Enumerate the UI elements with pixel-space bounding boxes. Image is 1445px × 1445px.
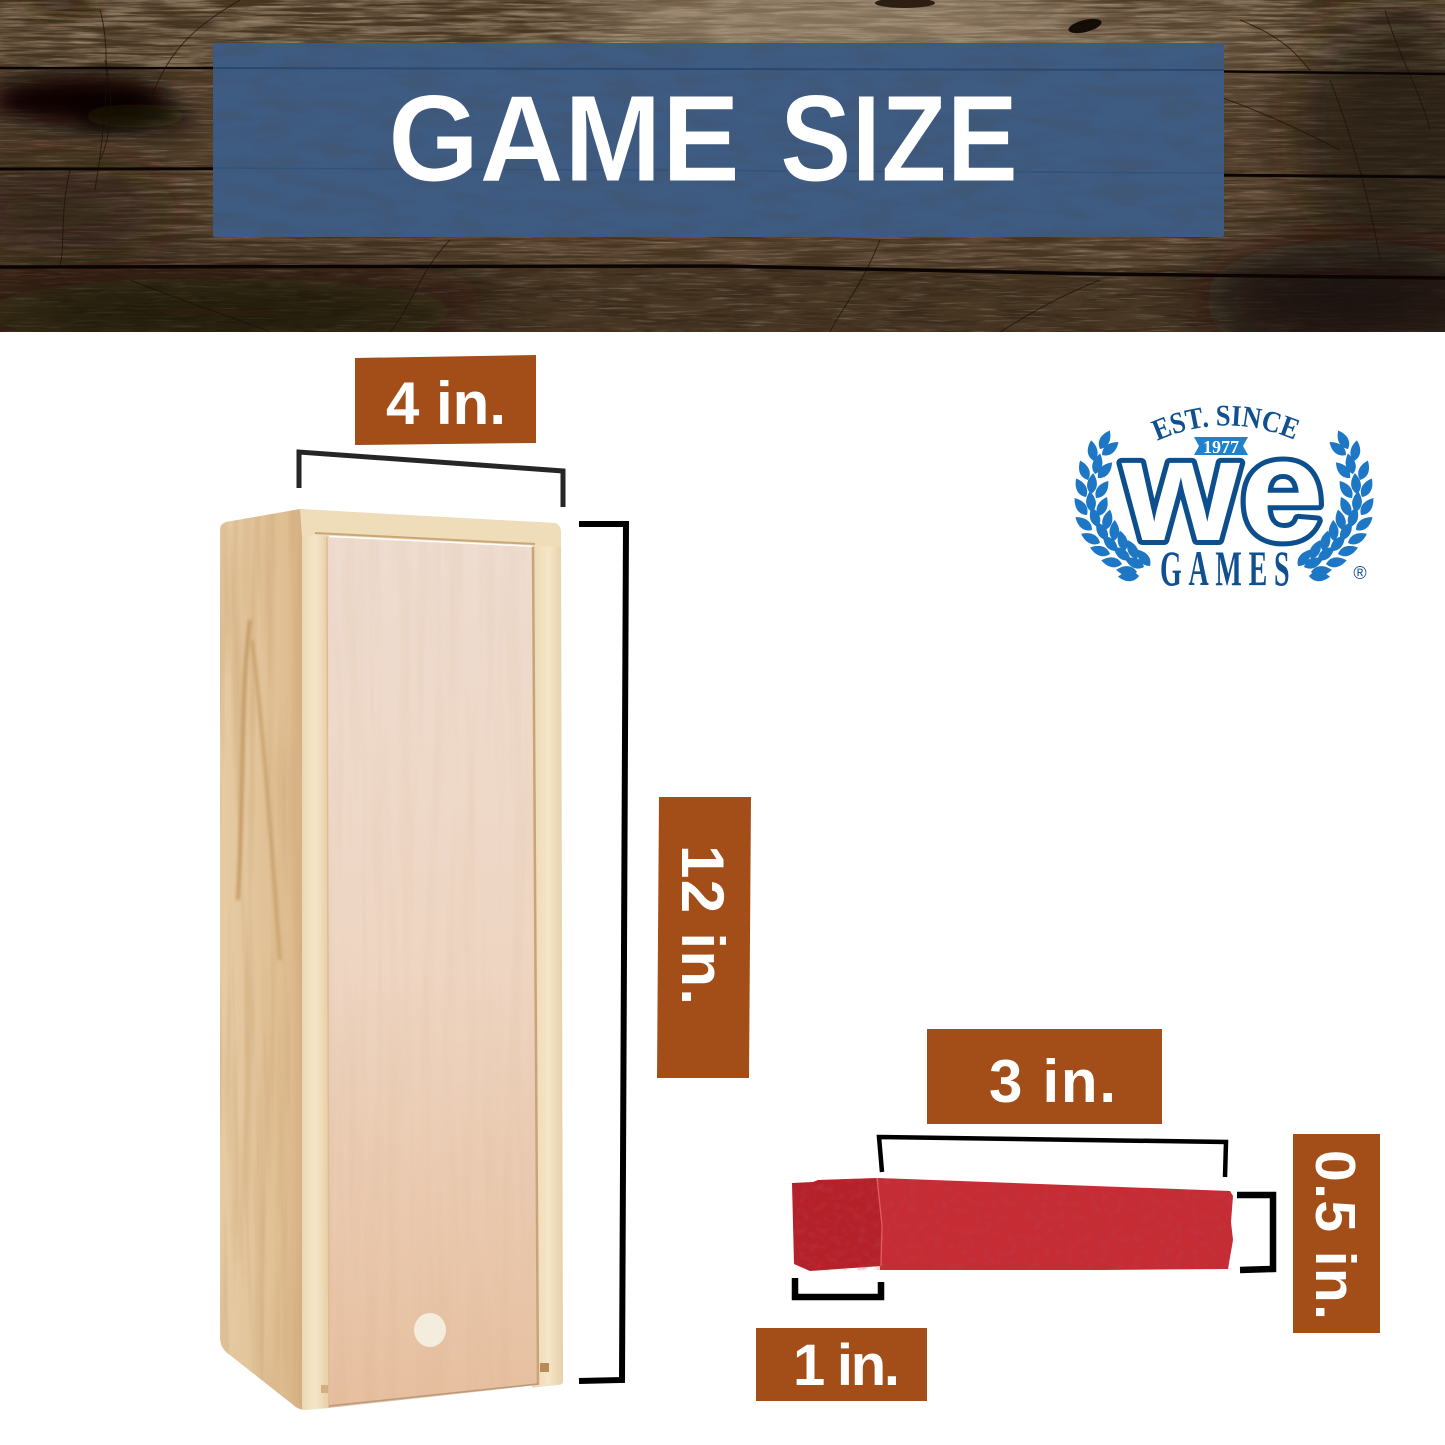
label: 4 in. — [355, 355, 536, 445]
logo arc text: EST. SINCE — [1150, 406, 1300, 441]
label: 3 in. — [927, 1029, 1162, 1124]
block texture — [790, 1176, 1236, 1273]
dimension: block height bracket — [1237, 1195, 1273, 1270]
logo 1977 ribbon — [1194, 437, 1248, 457]
scratches — [60, 0, 1430, 332]
box right rail — [532, 505, 565, 1390]
red block — [790, 1176, 1236, 1273]
logo arc guide — [1157, 426, 1297, 441]
label: 3 in.: 3 in. — [989, 1048, 1116, 1115]
box top rail — [300, 509, 561, 547]
logo right laurel — [1294, 428, 1377, 582]
label: 1 in.: 1 in. — [793, 1333, 900, 1398]
plank cracks — [0, 68, 1445, 278]
logo left laurel — [1071, 428, 1154, 582]
dimension: box width bracket — [299, 452, 563, 507]
title text — [388, 71, 1018, 208]
logo: WE Games — [1074, 406, 1374, 596]
title banner — [213, 43, 1224, 237]
label: 1 in. — [756, 1328, 927, 1401]
box sliding panel — [327, 537, 538, 1408]
header: wood plank background — [0, 0, 1445, 360]
box finger hole — [414, 1313, 446, 1347]
title text: SIZE — [780, 71, 1018, 208]
label: 4 in.: 4 in. — [386, 370, 506, 437]
box left rail — [302, 505, 329, 1415]
label: 0.5 in.: 0.5 in. — [1303, 1150, 1367, 1320]
logo 1977 ribbon: 1977 — [1203, 437, 1239, 457]
title text: GAME — [388, 71, 740, 208]
block long side — [878, 1178, 1233, 1270]
logo wordmark: we — [1121, 408, 1324, 571]
box side face — [218, 505, 304, 1415]
label: 12 in.: 12 in. — [669, 845, 736, 1005]
logo GAMES: GAMES — [1160, 541, 1296, 596]
label: 12 in. — [657, 797, 751, 1078]
wooden box — [218, 505, 565, 1415]
dimension: box height bracket — [579, 524, 626, 1381]
label: 0.5 in. — [1293, 1134, 1380, 1333]
dimension: block width bracket — [795, 1278, 881, 1297]
logo registered mark: ® — [1353, 563, 1367, 583]
dimension: block length bracket — [879, 1137, 1226, 1177]
block end face — [792, 1178, 882, 1271]
